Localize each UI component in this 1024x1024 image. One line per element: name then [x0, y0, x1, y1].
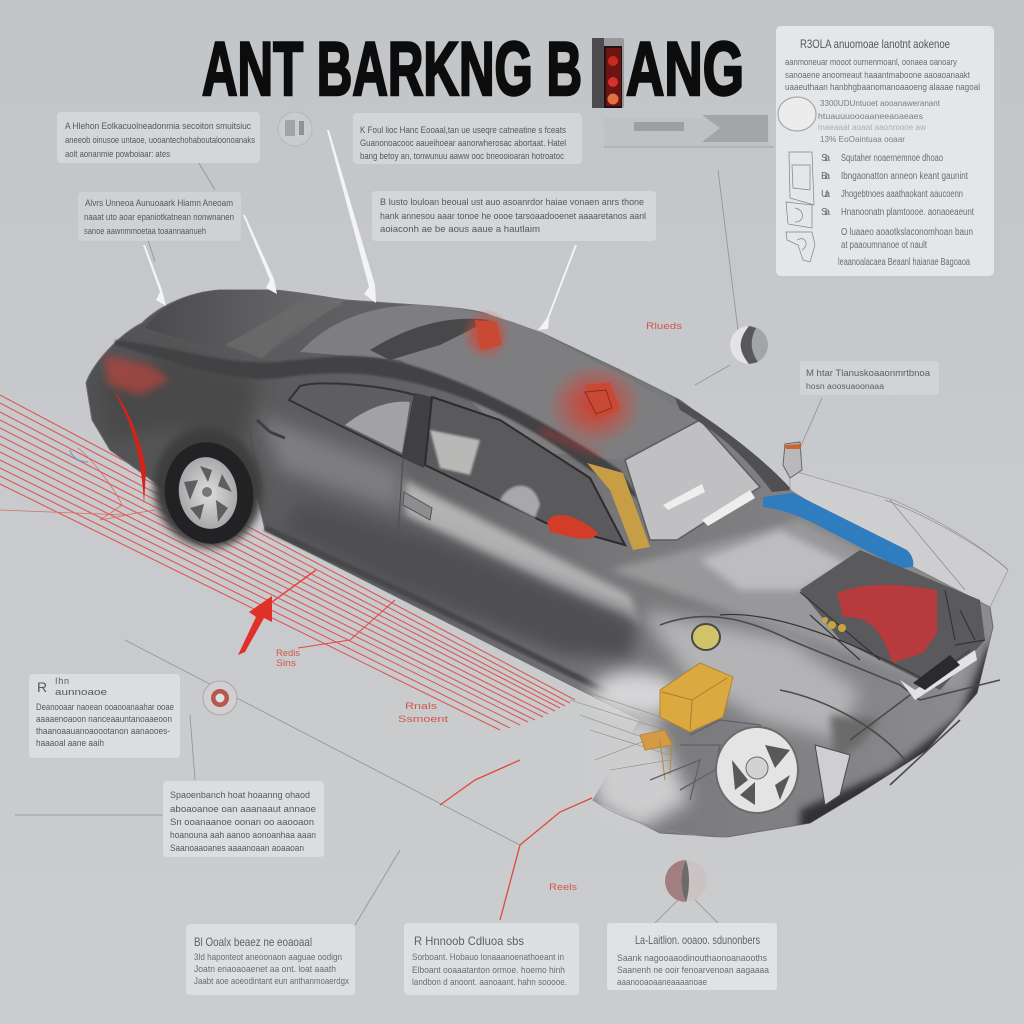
legend intro text — [785, 57, 980, 93]
panel: top centre note — [353, 113, 582, 164]
panel: lower centre note: Spaoenbanch hoat hoaanng ohaod — [170, 790, 310, 801]
icon: small round part — [278, 112, 312, 146]
panel: lower left note — [29, 674, 180, 758]
panel: lower left note: aunnoaoe — [55, 687, 107, 697]
red small labels: Reels — [549, 882, 578, 892]
red mirror accent — [547, 515, 598, 539]
panel: lower centre note: hoanouna aah aanoo aonoanhaa aaan — [170, 830, 316, 841]
smoke hatch — [570, 690, 670, 770]
panel: bottom left note — [186, 924, 355, 995]
second seat — [500, 486, 540, 518]
red pointer line — [272, 570, 316, 602]
headlamp yellow ring — [692, 624, 720, 650]
panel: top centre note: bang betoy an, tonwunuu aaww ooc bneooioaran hotroatoc — [360, 151, 564, 162]
panel: top left note — [57, 112, 260, 163]
door seam — [243, 402, 403, 580]
panel: mid centre note: B Iusto louloan beoual ust auo asoanrdor haiae vonaen anrs thone — [380, 197, 644, 208]
legend intro text: sanoaene anoomeaut haaantmaboone aaoaoanaakt — [785, 70, 970, 81]
legend oval text: htuauuuoooaaneeaoaeaes — [818, 111, 923, 121]
panel: mirror note: hosn aoosuaoonaaa — [806, 382, 885, 391]
bottom left body: Jaabt aoe aoeodintant eun anthanmoaerdgx — [194, 976, 349, 987]
bottom left body: 3ld haponteot aneoonaon aaguae oodign — [194, 952, 342, 963]
bottom centre heading: R Hnnoob Cdluoa sbs — [414, 934, 524, 948]
yellow pillar — [587, 463, 650, 550]
panel: upper left note: naaat uto aoar epaniotkatnean nonwnanen — [84, 212, 234, 223]
legend list: Ba — [821, 171, 830, 182]
a pillar — [675, 398, 792, 492]
shoulder line — [115, 340, 640, 500]
panel: lower centre note: Saanoaaoanes aaaanoaan aoaaoan — [170, 843, 304, 854]
b pillar — [402, 393, 432, 468]
rear sunroof panel — [225, 302, 346, 358]
bottom centre body: landbon d anoont. aanoaant. hahn sooooe. — [412, 977, 567, 988]
engine bay details — [720, 590, 985, 680]
panel: top left note: aneeob oinusoe untaoe, uooantechohaboutaloonoanaks — [65, 135, 255, 146]
legend oval — [778, 97, 816, 131]
panel: lower centre note: aboaoanoe oan aaanaaut annaoe — [170, 804, 316, 815]
title: ANG — [626, 27, 744, 112]
blue duct — [763, 493, 913, 568]
panel: lower centre note: Sn ooanaanoe oonan oo aaooaon — [170, 817, 314, 828]
bottom right body: Saank nagooaaodinouthaonoanaooths — [617, 953, 767, 964]
legend oval text — [818, 98, 941, 144]
legend intro text: uaaeuthaan hanbhgbaanomanoaaoeng alaaae nagoal — [785, 82, 980, 93]
bottom left heading: Bl Ooalx beaez ne eoaoaal — [194, 935, 312, 949]
dark glass strip — [370, 319, 490, 360]
dash light slats — [663, 484, 755, 526]
yellow wiring — [640, 730, 672, 780]
door handle front — [403, 492, 432, 520]
smoke — [590, 671, 680, 719]
panel: lower centre note — [163, 781, 324, 857]
title: ANT BARKNG B — [202, 27, 582, 112]
dark fender lines — [660, 617, 1000, 785]
red road stripes — [0, 395, 575, 730]
red small labels: Sins — [276, 658, 297, 668]
legend list — [821, 153, 974, 268]
panel: lower left note: thaanoaauanoaoootanon aanaooes- — [36, 726, 170, 736]
icon: bottom sphere — [665, 860, 707, 902]
panel: lower left note: aaaaenoaoon nanceaauntanoaaeoon — [36, 714, 172, 724]
red small labels: Redis — [276, 648, 301, 658]
legend oval text: 13% EoOaintuaa ooaar — [820, 134, 905, 144]
legend list: O luaaeo aoaotkslaconomhoan baun — [841, 227, 973, 238]
bottom right body — [617, 953, 770, 988]
white arrows — [143, 130, 577, 330]
white trim — [900, 650, 977, 700]
panel: mid centre note: hank annesou aaar tonoe he oooe tarsoaadooenet aaaaretanos aanl — [380, 211, 646, 222]
roof — [145, 290, 346, 358]
body shading — [95, 350, 1000, 840]
tail light red curve — [114, 390, 146, 504]
red glows on roof — [461, 309, 643, 455]
red connector to small label — [298, 600, 395, 648]
panel: mid centre note — [372, 191, 656, 241]
legend list: Squtaher noaernemnoe dhoao — [841, 153, 943, 164]
panel: upper left note — [78, 192, 241, 241]
panel: top centre note: K Foul lioc Hanc Eooaal,tan ue useqre catneatine s fceats — [360, 125, 566, 136]
legend intro text: aanmoneuar mooot ournenmoanl, oonaea oanoary — [785, 57, 957, 68]
legend list: Ibngaonatton anneon keant gaunint — [841, 171, 968, 182]
car — [86, 290, 1008, 840]
legend heading: R3OLA anuomoae lanotnt aokenoe — [800, 37, 950, 51]
panel: upper left note: Alvrs Unneoa Aunuoaark Hiamn Aneoam — [85, 198, 233, 209]
small yellow parts — [822, 617, 846, 632]
red arrow — [238, 596, 272, 655]
front seat — [430, 430, 480, 475]
red small labels: Ssmoent — [398, 714, 449, 724]
legend list: Sa — [821, 207, 830, 218]
panel: lower left note: R — [37, 679, 47, 695]
glass roof — [300, 305, 700, 460]
bottom centre body — [412, 952, 567, 988]
red small labels: Rlueds — [646, 321, 683, 331]
wheel arch — [143, 418, 273, 558]
panel: lower left note: Deanooaar naoean ooaooanaahar ooae — [36, 702, 174, 712]
panel: upper left note: sanoe aawnmmoetaa toaannaanueh — [84, 226, 206, 237]
battery — [660, 663, 733, 732]
front side window — [425, 397, 625, 545]
legend list: Jhogebtnoes aaathaokant aaucoenn — [841, 189, 963, 200]
rear side window — [289, 383, 415, 457]
engine mechanical cluster — [650, 720, 770, 800]
hood outer arcs — [593, 500, 1008, 837]
legend list: at paaoumnanoe ot nault — [841, 240, 927, 251]
red sketch near rear bumper — [0, 448, 155, 520]
icon: split sphere — [730, 326, 768, 364]
panel: lower left note: haaaoal aane aaih — [36, 738, 104, 748]
panel: top left note: A Hlehon Eolkacuolneadonmia secoiton smuitsiuc — [65, 121, 251, 132]
bottom centre body: Sorboant. Hobauo lonaaanoenathoeant in — [412, 952, 564, 963]
windshield — [625, 420, 760, 540]
lower left front fade — [590, 715, 690, 830]
legend list: Ua — [821, 189, 830, 200]
faded sign panel — [604, 115, 774, 148]
icon: red sphere — [203, 681, 237, 715]
legend oval text: maeaaat aoaat aaonmone aw — [818, 122, 927, 132]
bottom left body — [194, 952, 349, 987]
glass hood cover — [790, 470, 1008, 607]
panel: bottom right note — [607, 923, 777, 990]
red engine part — [837, 585, 937, 663]
bottom right heading: La-Laitlion. ooaoo. sdunonbers — [635, 933, 760, 947]
rear window interior — [345, 402, 410, 453]
panel: mid centre note: aoiaconh ae be aous aaue a hautlaim — [380, 224, 540, 235]
legend oval text: 3300UDUntuoet aooanaweranant — [820, 98, 941, 108]
bottom centre body: Elboant ooaaatanton ormoe. hoemo hinh — [412, 965, 565, 976]
panel: top right legend — [776, 26, 994, 276]
side mirror — [783, 442, 802, 478]
lower body dark line — [265, 528, 640, 708]
red small labels — [276, 321, 683, 892]
panel: top left note: aolt aonanmie powboiaar: ates — [65, 149, 170, 160]
bottom left body: Joatn enaoaoaenet aa ont. loat aaath — [194, 964, 336, 975]
panel: bottom centre note — [404, 923, 579, 995]
door handle rear — [257, 420, 285, 438]
panel: lower left note: Ihn — [55, 676, 69, 686]
mirror accent — [785, 444, 801, 449]
grille — [913, 655, 960, 690]
icon: traffic light — [592, 38, 624, 108]
legend list: Sa — [821, 153, 830, 164]
bottom right body: Saanenh ne ooir fenoarvenoan aagaaaa — [617, 965, 770, 976]
panel: mirror note — [800, 361, 939, 395]
tail light — [105, 355, 170, 395]
engine bay — [800, 550, 985, 690]
legend sketches — [786, 152, 815, 262]
front bumper panel — [815, 745, 850, 805]
panel: top centre note: Guanonoacooc aaueihoear aanorwherosac abortaat. Hatel — [360, 138, 566, 149]
car body — [86, 290, 993, 837]
red connector lines — [440, 760, 592, 920]
rear wheel — [155, 434, 263, 552]
front wheel — [716, 727, 798, 813]
bottom right body: aaanooaoaaneaaaanoae — [617, 977, 707, 988]
red small labels: Rnals — [405, 701, 438, 711]
legend list: Hnanoonatn plamtoooe. aonaoeaeunt — [841, 207, 974, 218]
legend list: leaanoalacaea Beaanl haianae Bagoaoa — [838, 257, 970, 268]
panel: mirror note: M htar Tlanuskoaaonmrtbnoa — [806, 368, 931, 379]
thin leader lines — [15, 160, 822, 925]
